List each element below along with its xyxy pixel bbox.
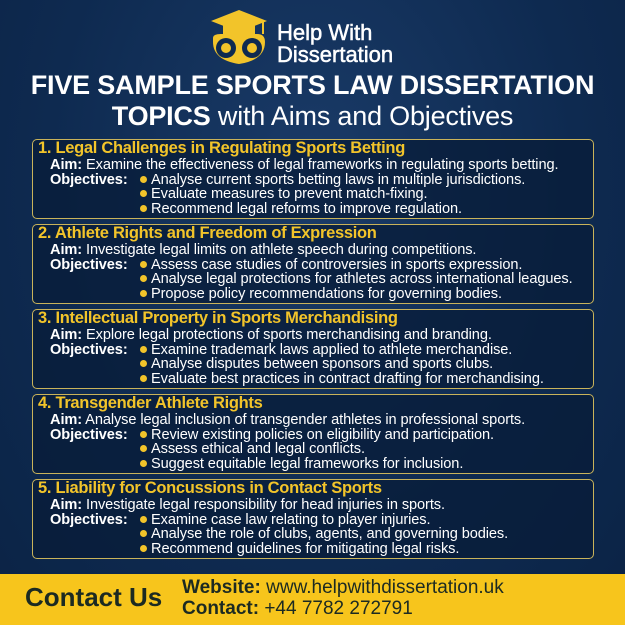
panel: topic 1: Objectives: bbox=[50, 172, 128, 188]
icon: owl with cap bbox=[211, 10, 267, 64]
contact heading: Contact Us bbox=[25, 582, 162, 612]
footer: contact bbox=[0, 574, 625, 625]
panel: topic 4: Suggest equitable legal frameworks for inclusion. bbox=[151, 456, 463, 472]
panel: topic 1: Recommend legal reforms to improve regulation. bbox=[151, 201, 462, 217]
panel: topic 3: 3. Intellectual Property in Sports Merchandising bbox=[38, 309, 398, 327]
logo bbox=[211, 10, 393, 67]
panel: topic 1: Evaluate measures to prevent match-fixing. bbox=[151, 186, 427, 202]
panel: topic 5: Objectives: bbox=[50, 512, 128, 528]
title: TOPICS with Aims and Objectives bbox=[112, 101, 513, 131]
panel: topic 2: Aim: Investigate legal limits on athlete speech during competitions. bbox=[50, 242, 476, 258]
panel: topic 4: 4. Transgender Athlete Rights bbox=[38, 394, 262, 412]
panel: topic 4: Review existing policies on eligibility and participation. bbox=[151, 427, 494, 443]
panel: topic 5: 5. Liability for Concussions in Contact Sports bbox=[38, 479, 382, 497]
panel: topic 5 bbox=[32, 479, 594, 559]
panel: topic 5: Examine case law relating to player injuries. bbox=[151, 512, 430, 528]
panel: topic 4: Assess ethical and legal conflicts. bbox=[151, 441, 365, 457]
title bbox=[31, 70, 594, 131]
brand name bbox=[277, 20, 393, 67]
panel: topic 3 bbox=[32, 309, 594, 389]
panel: topic 4 bbox=[32, 394, 594, 474]
panel: topic 2 bbox=[32, 224, 594, 304]
title: FIVE SAMPLE SPORTS LAW DISSERTATION bbox=[31, 70, 594, 100]
panel: topic 3: Objectives: bbox=[50, 342, 128, 358]
panel: topic 2: 2. Athlete Rights and Freedom of Expression bbox=[38, 224, 377, 242]
panel: topic 5: Aim: Investigate legal responsibility for head injuries in sports. bbox=[50, 497, 445, 513]
contact details: Contact: +44 7782 272791 bbox=[182, 598, 413, 619]
panel: topic 5: Analyse the role of clubs, agents, and governing bodies. bbox=[151, 526, 508, 542]
panel: topic 3: Examine trademark laws applied to athlete merchandise. bbox=[151, 342, 512, 358]
panel: topic 2: Objectives: bbox=[50, 257, 128, 273]
brand name: Dissertation bbox=[277, 42, 393, 67]
panel: topic 1: 1. Legal Challenges in Regulating Sports Betting bbox=[38, 139, 405, 157]
panel: topic 2: Analyse legal protections for athletes across international leagues. bbox=[151, 271, 573, 287]
panel: topic 1 bbox=[32, 139, 594, 219]
panel: topic 3: Aim: Explore legal protections of sports merchandising and branding. bbox=[50, 327, 492, 343]
panel: topic 2: Propose policy recommendations for governing bodies. bbox=[151, 286, 502, 302]
panel: topic 2: Assess case studies of controversies in sports expression. bbox=[151, 257, 522, 273]
contact details bbox=[182, 577, 504, 619]
brand name: Help With bbox=[277, 20, 372, 45]
panel: topic 1: Aim: Examine the effectiveness of legal frameworks in regulating sports betting. bbox=[50, 157, 558, 173]
panel: topic 3: Evaluate best practices in contract drafting for merchandising. bbox=[151, 371, 544, 387]
contact details: Website: www.helpwithdissertation.uk bbox=[182, 577, 504, 598]
panel: topic 1: Analyse current sports betting laws in multiple jurisdictions. bbox=[151, 172, 525, 188]
panel: topic 5: Recommend guidelines for mitigating legal risks. bbox=[151, 541, 459, 557]
panel: topic 4: Objectives: bbox=[50, 427, 128, 443]
panel: topic 3: Analyse disputes between sponsors and sports clubs. bbox=[151, 356, 493, 372]
panel: topic 4: Aim: Analyse legal inclusion of transgender athletes in professional sports. bbox=[50, 412, 525, 428]
